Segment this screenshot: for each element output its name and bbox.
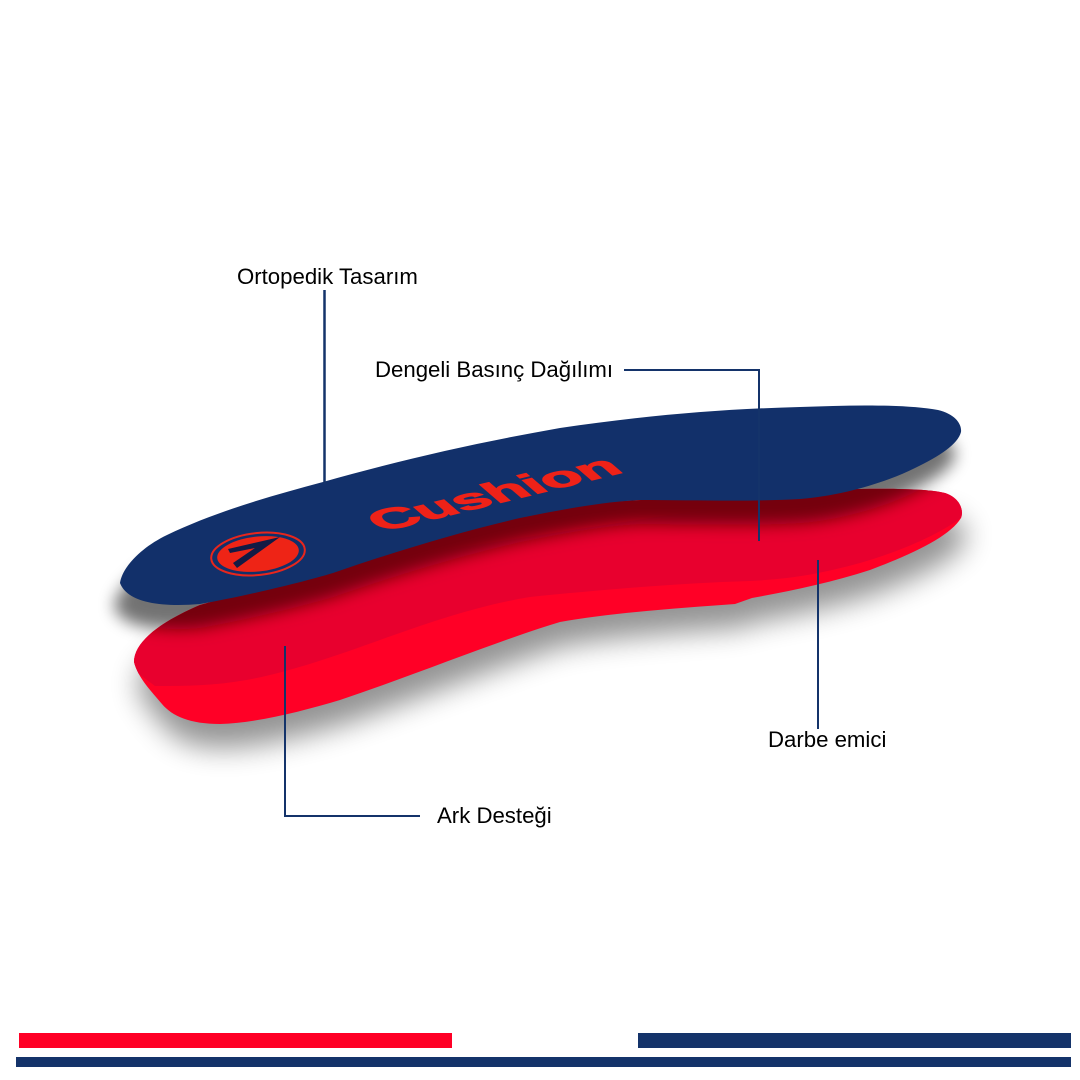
footer: red bar xyxy=(19,1033,452,1048)
navy insole top layer xyxy=(120,405,961,605)
brand wordmark: Cushion: Cushion xyxy=(356,450,631,537)
label: Ark Desteği: Ark Desteği xyxy=(437,803,552,828)
label: Ark Desteği xyxy=(285,646,552,828)
logo emblem xyxy=(209,528,307,580)
footer: navy bar full width xyxy=(16,1057,1071,1067)
drop shadows xyxy=(114,429,966,748)
label: Ortopedik Tasarım: Ortopedik Tasarım xyxy=(237,264,418,289)
shadow cast on the red insole xyxy=(148,488,938,640)
label: Darbe emici: Darbe emici xyxy=(768,727,886,752)
label: Dengeli Basınç Dağılımı: Dengeli Basınç Dağılımı xyxy=(375,357,613,382)
red insole base layer xyxy=(134,488,962,724)
label: Dengeli Basınç Dağılımı xyxy=(375,357,759,541)
footer: navy bar right xyxy=(638,1033,1071,1048)
red insole top surface xyxy=(134,488,962,686)
